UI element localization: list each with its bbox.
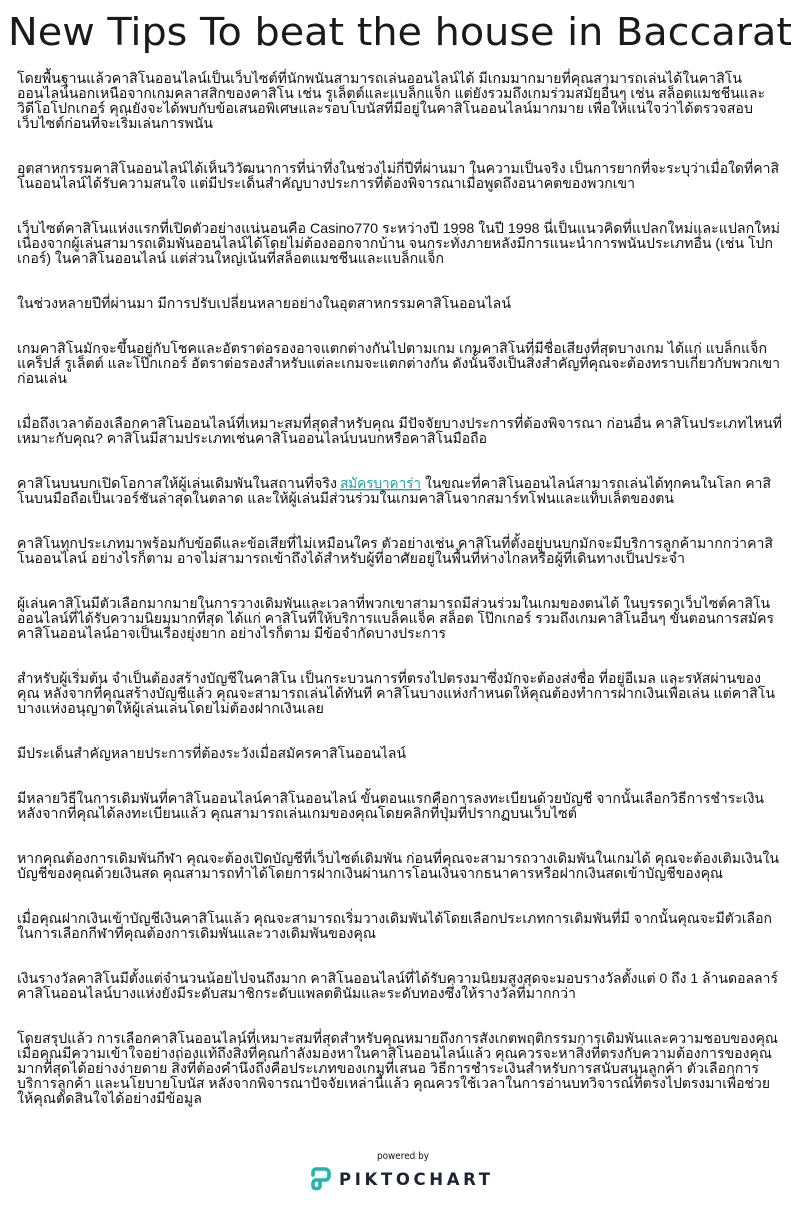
text block: paragraph 8: คาสิโนทุกประเภทมาพร้อมกับข้อดีและข้อเสียที่ไม่เหมือนใคร ตัวอย่างเช่น คาสิโนที่ตั้งอยู่บนบกมักจะมีบริการลูกค้ามากกว่าคาสิ	[17, 533, 773, 552]
text block: paragraph 2	[17, 159, 779, 192]
Piktochart wordmark: PIKTOCHART	[339, 1170, 491, 1189]
text block: paragraph 16: ให้คุณตัดสินใจได้อย่างมีข้อมูล	[17, 1090, 202, 1107]
text block: paragraph 13	[17, 849, 779, 882]
text block: paragraph 7 with link: คาสิโนบนบกเปิดโอกาสให้ผู้เล่นเดิมพันในสถานที่จริง	[17, 474, 337, 492]
text block: paragraph 3	[17, 219, 780, 266]
text block: paragraph 14: เมื่อคุณฝากเงินเข้าบัญชีเงินคาสิโนแล้ว คุณจะสามารถเริ่มวางเดิมพันได้โดยเลือกประเภทการเดิมพันที่มี จากนั้นคุณจะมีตัวเลือก	[17, 908, 772, 927]
text block: paragraph 3: เกอร์) ในคาสิโนออนไลน์ แต่ส่วนใหญ่เน้นที่สล็อตแมชชีนและแบล็กแจ็ก	[17, 249, 444, 266]
text block: paragraph 15: คาสิโนออนไลน์บางแห่งยังมีระดับสมาชิกระดับแพลตตินัมและระดับทองซึ่งให้รางวัลที่มากกว่า	[17, 984, 576, 1001]
text block: paragraph 10	[17, 669, 775, 717]
text block: paragraph 6: เมื่อถึงเวลาต้องเลือกคาสิโนออนไลน์ที่เหมาะสมที่สุดสำหรับคุณ มีปัจจัยบางประการที่ต้องพิจารณา ก่อนอื่น คาสิโนประเภทไหนที่	[17, 414, 782, 432]
text block: paragraph 10: บางแห่งอนุญาตให้ผู้เล่นเล่นโดยไม่ต้องฝากเงินเลย	[17, 700, 324, 717]
text block: paragraph 12: หลังจากที่คุณได้ลงทะเบียนแล้ว คุณสามารถเล่นเกมของคุณโดยคลิกที่ปุ่มที่ปรากฏบนเว็บไซต์	[17, 804, 577, 822]
powered by label: powered by	[377, 1151, 429, 1162]
text block: paragraph 5: แคร็ปส์ รูเล็ตต์ และโป๊กเกอร์ อัตราต่อรองสำหรับแต่ละเกมจะแตกต่างกัน ดังนั้นจึงเป็นสิ่งสำคัญที่คุณจะต้องทราบเกี่ยวกับพวกเขา	[17, 353, 780, 372]
title: New Tips To beat the house in Baccarat	[8, 10, 792, 54]
text block: paragraph 7 with link: โนบนมือถือเป็นเวอร์ชันล่าสุดในตลาด และให้ผู้เล่นมีส่วนร่วมในเกมคาสิโนจากสมาร์ทโฟนและแท็บเล็ตของตน	[17, 489, 674, 507]
text block: paragraph 15: เงินรางวัลคาสิโนมีตั้งแต่จำนวนน้อยไปจนถึงมาก คาสิโนออนไลน์ที่ได้รับความนิยมสูงสุดจะมอบรางวัลตั้งแต่ 0 ถึง 1 ล้านดอลลาร์	[17, 968, 778, 987]
text block: paragraph 5: ก่อนเล่น	[17, 370, 67, 386]
text block: paragraph 5	[17, 338, 780, 386]
text block: paragraph 13: หากคุณต้องการเดิมพันกีฬา คุณจะต้องเปิดบัญชีที่เว็บไซต์เดิมพัน ก่อนที่คุณจะสามารถวางเดิมพันในเกมได้ คุณจะต้องเติมเงินใน	[17, 849, 779, 867]
text block: paragraph 12	[17, 788, 764, 822]
text block: paragraph 9	[17, 594, 774, 642]
text block: paragraph 9: ออนไลน์ที่ได้รับความนิยมมากที่สุด ได้แก่ คาสิโนที่ให้บริการแบล็คแจ็ค สล็อต โป๊กเกอร์ รวมถึงเกมคาสิโนอื่นๆ ขั้นตอนการสมัคร	[17, 608, 774, 627]
text block: paragraph 8: โนออนไลน์ อย่างไรก็ตาม อาจไม่สามารถเข้าถึงได้สำหรับผู้ที่อาศัยอยู่ในพื้นที่ห่างไกลหรือผู้ที่เดินทางเป็นประจำ	[17, 548, 685, 567]
text block: paragraph 12: มีหลายวิธีในการเดิมพันที่คาสิโนออนไลน์คาสิโนออนไลน์ ขั้นตอนแรกคือการลงทะเบียนด้วยบัญชี จากนั้นเลือกวิธีการชำระเงิน	[17, 788, 764, 806]
text block: paragraph 7 with link	[17, 474, 771, 507]
text block: paragraph 2: อุตสาหกรรมคาสิโนออนไลน์ได้เห็นวิวัฒนาการที่น่าทึ่งในช่วงไม่กี่ปีที่ผ่านมา ในความเป็นจริง เป็นการยากที่จะระบุว่าเมื่อใดที่คาสิ	[17, 159, 779, 177]
text block: paragraph 8	[17, 533, 773, 567]
icon: Piktochart logo mark	[313, 1169, 329, 1188]
text block: paragraph 16: โดยสรุปแล้ว การเลือกคาสิโนออนไลน์ที่เหมาะสมที่สุดสำหรับคุณหมายถึงการสังเกตพฤติกรรมการเดิมพันและความชอบของคุณ	[17, 1029, 778, 1047]
text block: paragraph 10: สำหรับผู้เริ่มต้น จำเป็นต้องสร้างบัญชีในคาสิโน เป็นกระบวนการที่ตรงไปตรงมาซึ่งมักจะต้องส่งชื่อ ที่อยู่อีเมล และรหัสผ่านของ	[17, 669, 761, 687]
text block: paragraph 1: วิดีโอโปกเกอร์ คุณยังจะได้พบกับข้อเสนอพิเศษและรอบโบนัสที่มีอยู่ในคาสิโนออนไลน์มากมาย เพื่อให้แน่ใจว่าได้ตรวจสอบ	[17, 99, 753, 117]
text block: paragraph 1: ออนไลน์นอกเหนือจากเกมคลาสสิกของคาสิโน เช่น รูเล็ตต์และแบล็กแจ็ก แต่ยังรวมถึงเกมร่วมสมัยอื่นๆ เช่น สล็อตแมชชีนและ	[17, 84, 765, 102]
text block: paragraph 5: เกมคาสิโนมักจะขึ้นอยู่กับโชคและอัตราต่อรองอาจแตกต่างกันไปตามเกม เกมคาสิโนที่มีชื่อเสียงที่สุดบางเกม ได้แก่ แบล็กแจ็ก	[17, 338, 767, 357]
text block: paragraph 7 with link: สมัครบาคาร่า	[340, 475, 421, 491]
text block: paragraph 13: บัญชีของคุณด้วยเงินสด คุณสามารถทำได้โดยการฝากเงินผ่านการโอนเงินจากธนาคารหรือฝากเงินสดเข้าบัญชีของคุณ	[17, 865, 723, 882]
footer: powered by Piktochart	[313, 1151, 491, 1189]
text block: paragraph 7 with link: ในขณะที่คาสิโนออนไลน์สามารถเล่นได้ทุกคนในโลก คาสิ	[425, 474, 771, 492]
text block: paragraph 1	[17, 68, 765, 131]
text block: paragraph 9: คาสิโนออนไลน์อาจเป็นเรื่องยุ่งยาก อย่างไรก็ตาม มีข้อจำกัดบางประการ	[17, 624, 446, 642]
text block: paragraph 16: เมื่อคุณมีความเข้าใจอย่างถ่องแท้ถึงสิ่งที่คุณกำลังมองหาในคาสิโนออนไลน์แล้ว คุณควรจะหาสิ่งที่ตรงกับความต้องการของคุณ	[17, 1044, 772, 1062]
text block: paragraph 6: เหมาะกับคุณ? คาสิโนมีสามประเภทเช่นคาสิโนออนไลน์บนบกหรือคาสิโนมือถือ	[17, 430, 487, 447]
text block: paragraph 1: โดยพื้นฐานแล้วคาสิโนออนไลน์เป็นเว็บไซต์ที่นักพนันสามารถเล่นออนไลน์ได้ มีเกมมากมายที่คุณสามารถเล่นได้ในคาสิโน	[17, 68, 742, 87]
text block: paragraph 16: มากที่สุดได้อย่างง่ายดาย สิ่งที่ต้องคำนึงถึงคือประเภทของเกมที่เสนอ วิธีการชำระเงินสำหรับการสนับสนุนลูกค้า ตัวเลือกการ	[17, 1059, 759, 1077]
text block: paragraph 2: โนออนไลน์ได้รับความสนใจ แต่มีประเด็นสำคัญบางประการที่ต้องพิจารณาเมื่อพูดถึงอนาคตของพวกเขา	[17, 174, 635, 192]
text block: paragraph 3: เว็บไซต์คาสิโนแห่งแรกที่เปิดตัวอย่างแน่นอนคือ Casino770 ระหว่างปี 1998 ในปี 1998 นี่เป็นแนวคิดที่แปลกใหม่และแปลกใหม่	[17, 219, 780, 236]
text block: paragraph 16: บริการลูกค้า และนโยบายโบนัส หลังจากพิจารณาปัจจัยเหล่านี้แล้ว คุณควรใช้เวลาในการอ่านบทวิจารณ์ที่ตรงไปตรงมาเพื่อช่วย	[17, 1073, 770, 1092]
text block: paragraph 11: มีประเด็นสำคัญหลายประการที่ต้องระวังเมื่อสมัครคาสิโนออนไลน์	[17, 744, 406, 761]
text block: paragraph 14: ในการเลือกกีฬาที่คุณต้องการเดิมพันและวางเดิมพันของคุณ	[17, 924, 376, 942]
text block: paragraph 15	[17, 968, 778, 1001]
text block: paragraph 3: เนื่องจากผู้เล่นสามารถเดิมพันออนไลน์ได้โดยไม่ต้องออกจากบ้าน จนกระทั่งภายหลังมีการแนะนำการพนันประเภทอื่น (เช่น โปก	[17, 234, 773, 252]
text block: paragraph 9: ผู้เล่นคาสิโนมีตัวเลือกมากมายในการวางเดิมพันและเวลาที่พวกเขาสามารถมีส่วนร่วมในเกมของตนได้ ในบรรดาเว็บไซต์คาสิโน	[17, 594, 770, 612]
text block: paragraph 14	[17, 908, 772, 942]
text block: paragraph 1: เว็บไซต์ก่อนที่จะเริ่มเล่นการพนัน	[17, 114, 213, 131]
text block: paragraph 16	[17, 1029, 778, 1107]
text block: paragraph 4: ในช่วงหลายปีที่ผ่านมา มีการปรับเปลี่ยนหลายอย่างในอุตสาหกรรมคาสิโนออนไลน์	[17, 294, 511, 312]
text block: paragraph 6	[17, 414, 782, 447]
text block: paragraph 10: คุณ หลังจากที่คุณสร้างบัญชีแล้ว คุณจะสามารถเล่นได้ทันที คาสิโนบางแห่งกำหนดให้คุณต้องทำการฝากเงินเพื่อเล่น แต่คาสิโน	[17, 684, 775, 702]
